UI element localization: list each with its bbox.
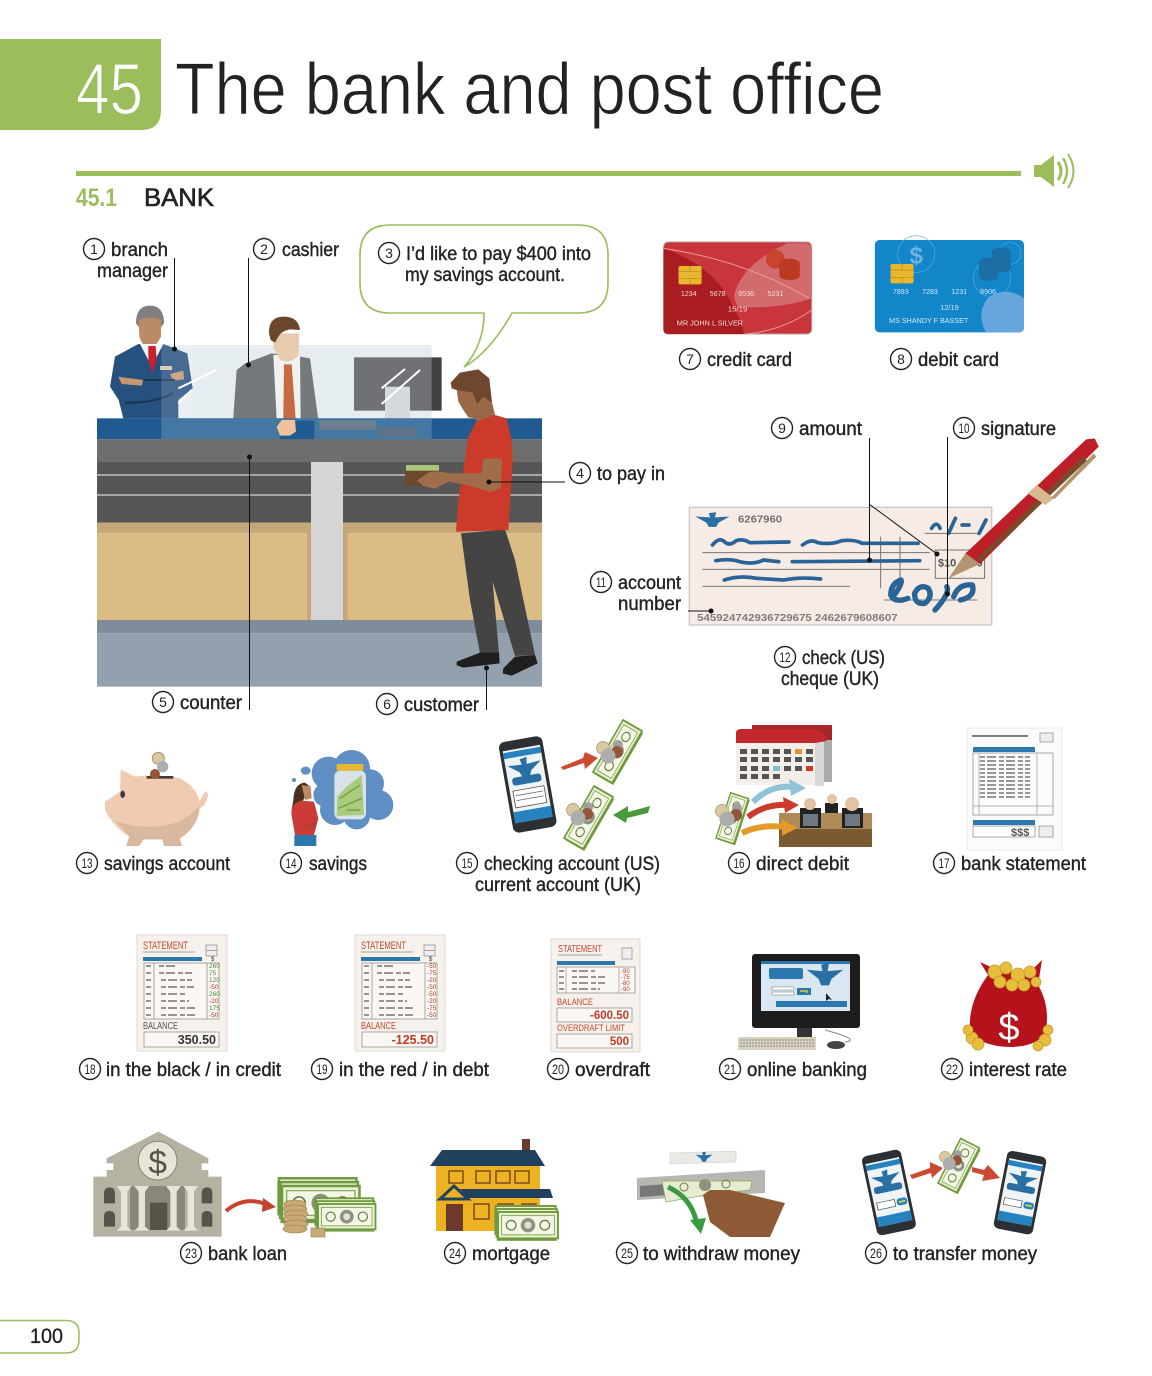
illustration: overdraft statement: 500 — [610, 1036, 629, 1048]
label: checking / current account: checking account (US) — [484, 854, 660, 875]
illustration: statement in credit: STATEMENT — [143, 940, 188, 952]
label: direct debit: direct debit — [756, 854, 850, 875]
label: savings: 14 — [286, 855, 297, 871]
label: in the red: in the red / in debt — [339, 1060, 490, 1081]
illustration: check with pen — [689, 438, 1099, 625]
illustration: credit card: 15/19 — [728, 305, 747, 314]
title: The bank and post office — [175, 49, 884, 130]
illustration: direct debit — [716, 725, 872, 847]
illustration: overdraft statement: -90 — [621, 969, 630, 975]
label: overdraft — [548, 1058, 651, 1081]
illustration: statement in debt: -75 — [427, 970, 437, 977]
illustration: debit card: 8906 — [980, 289, 996, 296]
label: branch manager: branch — [111, 240, 168, 261]
illustration: transfer money — [861, 1138, 1047, 1236]
illustration: debit card: 12/19 — [940, 303, 959, 312]
illustration: statement in debt: -20 — [427, 998, 437, 1005]
label: check / cheque: 12 — [780, 649, 791, 665]
label: credit card: 7 — [686, 351, 694, 367]
label: credit card — [680, 348, 792, 371]
label: savings account: 13 — [82, 855, 93, 871]
label: mortgage: mortgage — [472, 1244, 550, 1265]
illustration: statement in credit: -50 — [209, 984, 219, 991]
label: checking / current account: current account (UK) — [475, 875, 641, 896]
illustration: monitor — [354, 357, 442, 432]
section heading: BANK — [144, 184, 214, 212]
label: check / cheque: check (US) — [802, 648, 885, 669]
illustration: statement in debt: -20 — [427, 977, 437, 984]
label: cashier: cashier — [282, 240, 340, 261]
label: in the black: in the black / in credit — [106, 1060, 282, 1081]
label: checking / current account — [456, 852, 660, 896]
illustration: cashier figure — [233, 317, 318, 433]
label: cashier — [254, 238, 340, 261]
illustration: debit card: $ — [909, 243, 924, 269]
illustration: piggy bank — [105, 752, 208, 846]
illustration: statement in debt: -75 — [427, 1005, 437, 1012]
label: signature: signature — [981, 419, 1056, 440]
label: cashier: 2 — [260, 241, 268, 257]
illustration: overdraft statement: -75 — [621, 975, 630, 981]
speech bubble — [360, 225, 608, 367]
label: savings: savings — [309, 854, 367, 875]
illustration: overdraft statement: BALANCE — [557, 997, 593, 1008]
icon: audio speaker — [1034, 154, 1074, 188]
speech bubble: 3 — [385, 245, 393, 261]
illustration: bank counter scene — [97, 306, 542, 687]
illustration: bank statement: $$$ — [1011, 827, 1029, 839]
label: customer: customer — [404, 695, 480, 716]
label: direct debit: 16 — [734, 855, 745, 871]
illustration: overdraft statement: -80 — [621, 981, 630, 987]
illustration: debit card: 1231 — [951, 289, 967, 296]
chapter number tab — [0, 39, 161, 130]
label: bank loan: bank loan — [208, 1244, 287, 1265]
label: branch manager: manager — [97, 261, 169, 282]
illustration: statement in debt — [355, 935, 445, 1051]
illustration: credit card — [664, 242, 812, 334]
label: interest rate: interest rate — [969, 1060, 1067, 1081]
illustration: check with pen: 545924742936729675 2462679608607 — [697, 613, 898, 624]
label: online banking: online banking — [747, 1060, 867, 1081]
label: customer: 6 — [383, 696, 391, 712]
illustration: check with pen: $10 — [938, 558, 956, 570]
illustration: bank statement — [967, 728, 1062, 850]
page number tab — [0, 1320, 79, 1353]
label: to withdraw money: to withdraw money — [643, 1244, 800, 1265]
speech bubble: my savings account. — [405, 265, 565, 286]
label: to pay in — [570, 462, 665, 485]
illustration: credit card: 5231 — [768, 291, 783, 298]
leader lines for scene — [172, 258, 565, 710]
illustration: statement in debt: -50 — [427, 991, 437, 998]
label: counter: counter — [180, 693, 243, 714]
label: branch manager: 1 — [90, 241, 98, 257]
illustration: house and mortgage — [430, 1139, 558, 1241]
label: savings — [280, 852, 367, 875]
label: mortgage — [444, 1242, 550, 1265]
label: in the red: 19 — [316, 1061, 328, 1077]
label: bank statement: 17 — [938, 855, 950, 871]
illustration: bank building and loan — [93, 1132, 375, 1237]
leader lines for check — [688, 437, 950, 613]
illustration: statement in credit: 120 — [209, 977, 220, 984]
label: branch manager — [84, 238, 169, 282]
label: debit card — [890, 348, 999, 371]
illustration: statement in credit — [137, 935, 227, 1051]
label: account number: 11 — [596, 574, 606, 590]
illustration: overdraft statement: -90 — [621, 987, 630, 993]
illustration: overdraft statement: STATEMENT — [558, 944, 602, 955]
illustration: statement in credit: 75 — [209, 970, 217, 977]
illustration: overdraft statement: OVERDRAFT LIMIT — [557, 1023, 625, 1033]
section heading — [76, 184, 214, 212]
label: bank loan — [180, 1242, 287, 1265]
label: account number: account — [618, 573, 682, 594]
illustration: statement in debt: $ — [429, 957, 433, 963]
label: overdraft: 20 — [552, 1061, 564, 1077]
illustration: online banking computer — [738, 954, 860, 1050]
illustration: debit card: 7283 — [922, 289, 938, 296]
label: signature — [954, 418, 1056, 440]
illustration: debit card: 7893 — [893, 289, 909, 296]
illustration: interest rate money bag — [963, 960, 1053, 1051]
illustration: statement in debt: -125.50 — [392, 1033, 434, 1047]
illustration: withdraw money — [637, 1151, 785, 1237]
illustration: debit card — [875, 236, 1024, 332]
illustration: credit card: 1234 — [681, 291, 697, 298]
illustration: statement in credit: BALANCE — [143, 1020, 178, 1032]
illustration: credit card: 5678 — [710, 291, 726, 298]
illustration: statement in debt: STATEMENT — [361, 940, 406, 952]
illustration: statement in credit: -20 — [209, 998, 219, 1005]
illustration: overdraft statement: -600.50 — [590, 1010, 629, 1022]
illustration: debit card: MS SHANDY F BASSET — [889, 316, 969, 325]
illustration: statement in credit: 260 — [209, 991, 220, 998]
page number tab: 100 — [30, 1325, 63, 1348]
label: debit card: debit card — [918, 350, 999, 371]
illustration: interest rate money bag: $ — [998, 1007, 1020, 1049]
illustration: statement in credit: 260 — [209, 963, 220, 970]
label: counter — [152, 692, 243, 714]
label: check / cheque — [774, 646, 885, 690]
illustration: credit card: 9536 — [738, 291, 754, 298]
illustration: statement in credit: 350.50 — [178, 1033, 216, 1047]
illustration: savings jar and person — [291, 750, 393, 846]
label: signature: 10 — [958, 420, 970, 436]
illustration: overdraft statement — [551, 939, 640, 1052]
illustration: check with pen: 6267960 — [738, 515, 783, 526]
label: account number — [590, 572, 682, 615]
label: credit card: credit card — [707, 350, 792, 371]
label: to transfer money: to transfer money — [893, 1244, 1037, 1265]
section heading: 45.1 — [76, 184, 117, 212]
illustration: statement in debt: -50 — [427, 984, 437, 991]
label: debit card: 8 — [897, 351, 905, 367]
illustration: statement in credit: -50 — [209, 1012, 219, 1019]
label: to transfer money: 26 — [870, 1245, 882, 1261]
illustration: checking account — [498, 720, 650, 851]
label: amount: amount — [799, 419, 863, 440]
label: checking / current account: 15 — [462, 855, 473, 871]
label: bank statement: bank statement — [961, 854, 1087, 875]
label: savings account: savings account — [104, 854, 231, 875]
speech bubble: I’d like to pay $400 into — [406, 244, 591, 265]
label: amount — [772, 418, 863, 440]
illustration: customer figure — [405, 369, 538, 676]
label: amount: 9 — [778, 420, 786, 436]
label: mortgage: 24 — [449, 1245, 461, 1261]
label: to withdraw money: 25 — [621, 1245, 633, 1261]
illustration: statement in debt: BALANCE — [361, 1020, 396, 1032]
illustration: statement in credit: 175 — [209, 1005, 220, 1012]
label: bank loan: 23 — [185, 1245, 197, 1261]
illustration: statement in debt: -50 — [427, 1012, 437, 1019]
illustration: statement in credit: $ — [211, 957, 215, 963]
illustration: statement in debt: -50 — [427, 963, 437, 970]
label: to pay in: 4 — [576, 465, 584, 481]
illustration: check with pen: 50 — [971, 558, 983, 570]
label: online banking: 21 — [724, 1061, 736, 1077]
label: counter: 5 — [159, 694, 167, 710]
label: to pay in: to pay in — [597, 464, 665, 485]
illustration: bank building and loan: $ — [148, 1144, 167, 1181]
chapter number tab: 45 — [76, 50, 143, 130]
illustration: branch manager figure — [110, 306, 193, 419]
label: in the black: 18 — [84, 1061, 96, 1077]
label: check / cheque: cheque (UK) — [781, 669, 879, 690]
label: overdraft: overdraft — [575, 1060, 651, 1081]
cashier hand on counter — [277, 420, 417, 439]
label: account number: number — [618, 594, 682, 615]
label: customer — [376, 694, 480, 716]
illustration: credit card: MR JOHN L SILVER — [677, 318, 743, 327]
label: interest rate: 22 — [946, 1061, 958, 1077]
